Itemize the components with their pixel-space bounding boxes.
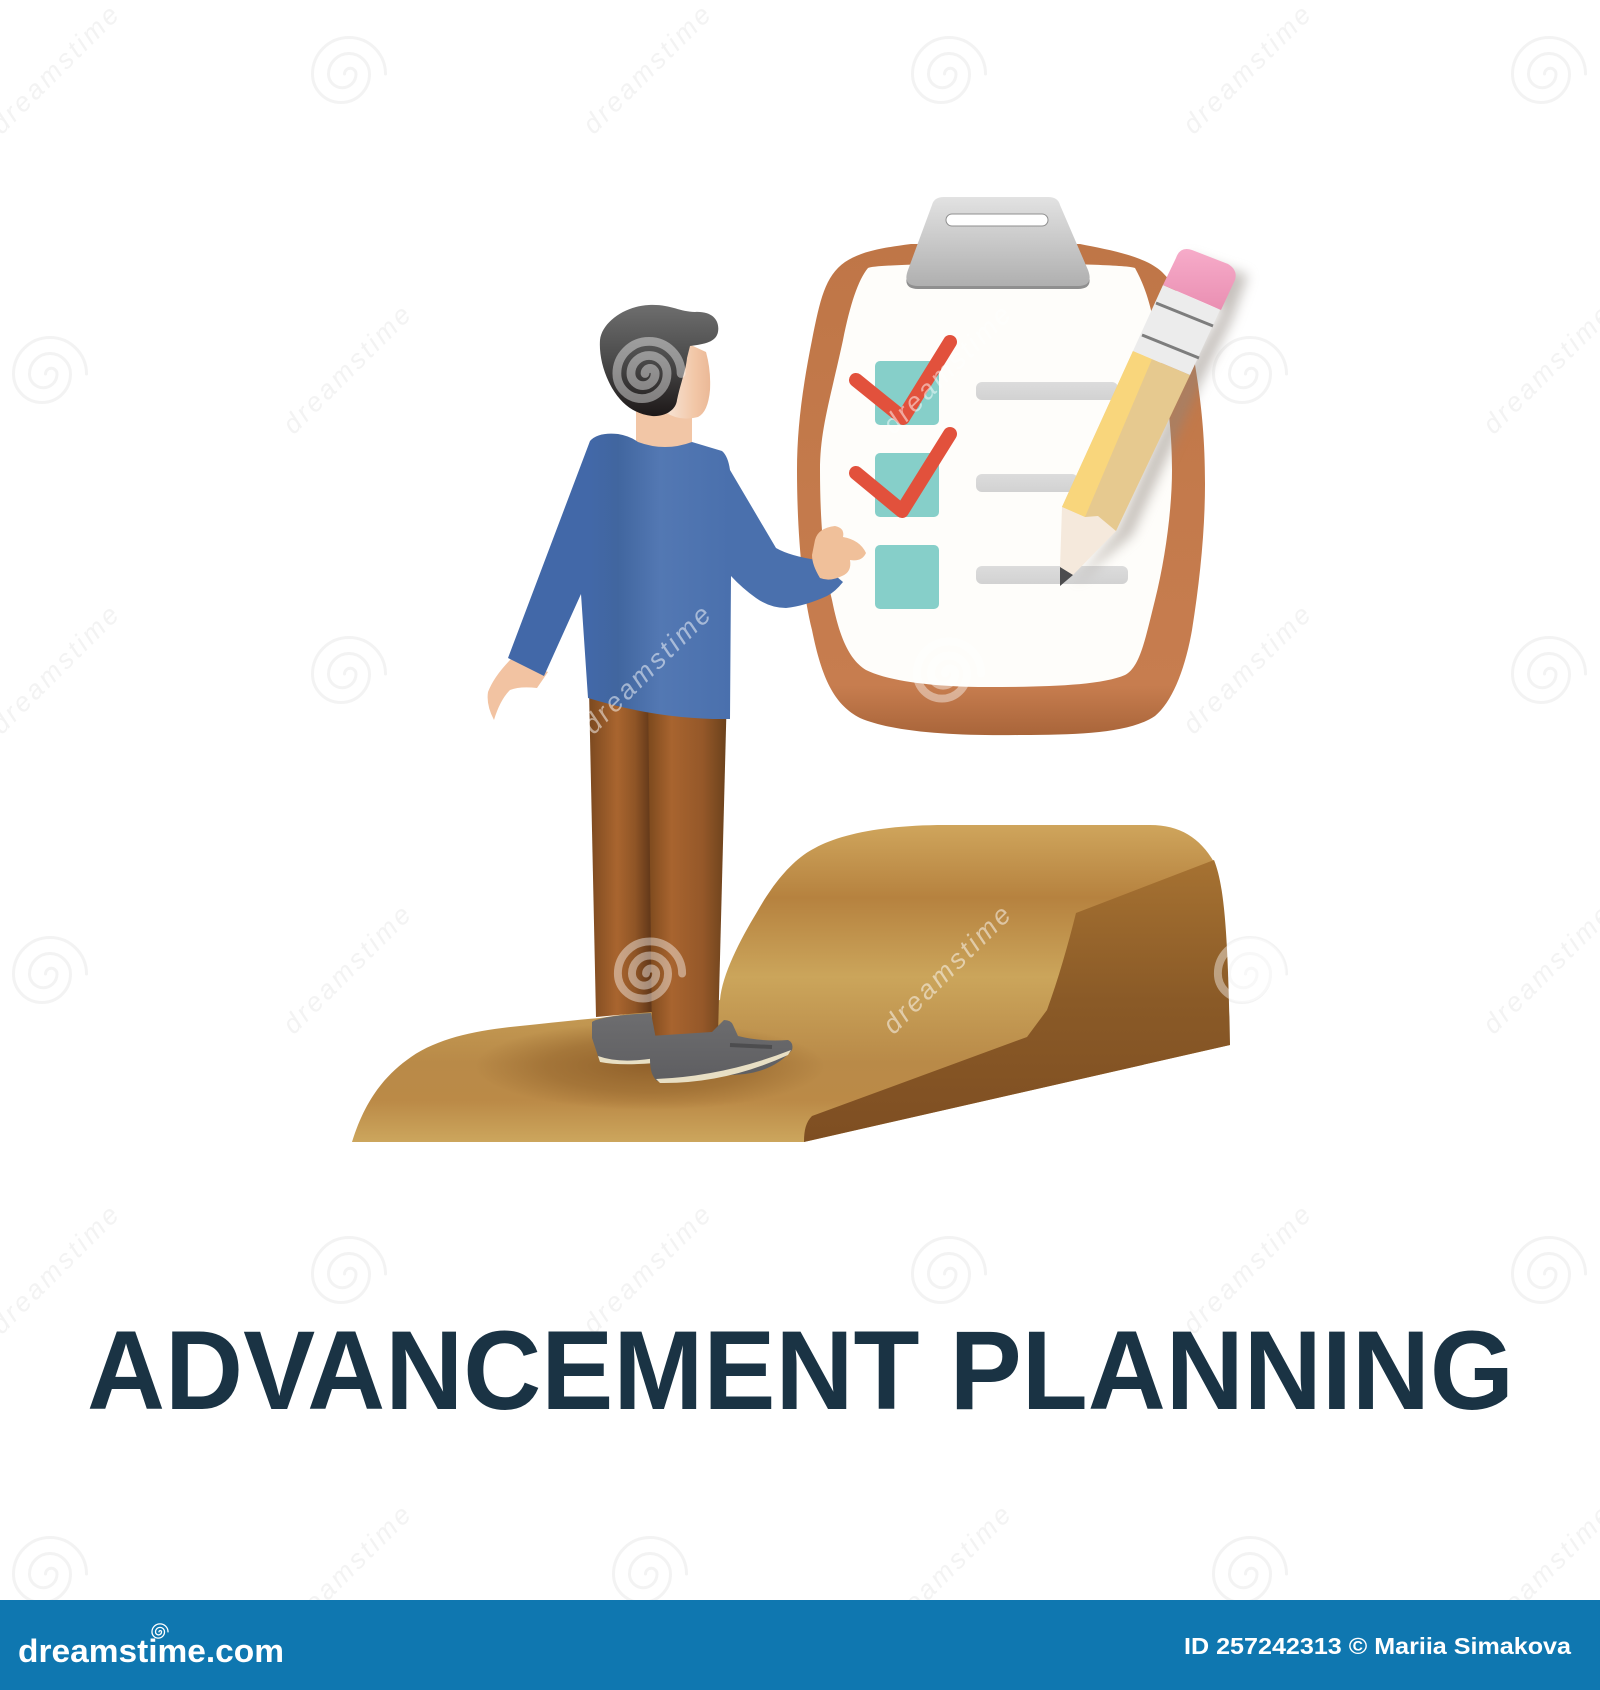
- pencil eraser: [1163, 249, 1236, 310]
- watermark text: dreamstime: [277, 900, 417, 1040]
- watermark text: dreamstime: [877, 1500, 1017, 1640]
- shoes: [592, 1013, 792, 1083]
- right hand: [812, 526, 866, 580]
- ground shadow under feet: [475, 1022, 825, 1110]
- clipboard: [797, 197, 1205, 735]
- watermark text: dreamstime: [577, 1200, 717, 1340]
- watermark text: dreamstime: [277, 300, 417, 440]
- watermark over illustration: dreamstime: [877, 300, 1017, 440]
- watermark text: dreamstime: [1177, 1200, 1317, 1340]
- ground: sloped hill: [352, 825, 1230, 1142]
- neck: [636, 410, 692, 449]
- person: [488, 305, 866, 1083]
- watermark text: dreamstime: [577, 0, 717, 140]
- clipboard board: [797, 244, 1205, 735]
- checkbox row 1: [856, 342, 1118, 425]
- cliff dark face: [804, 860, 1230, 1142]
- title: ADVANCEMENT PLANNING: [87, 1308, 1514, 1433]
- watermark over illustration: [577, 300, 1282, 1040]
- pencil: [1060, 249, 1248, 586]
- paper: [820, 264, 1172, 687]
- sweater: [508, 434, 843, 719]
- pencil shadow: [1074, 255, 1248, 584]
- watermark over illustration: dreamstime: [877, 900, 1017, 1040]
- face: [665, 340, 710, 419]
- pencil tip: [1060, 507, 1116, 575]
- watermark over illustration: dreamstime: [577, 600, 717, 740]
- watermark text: dreamstime: [1177, 0, 1317, 140]
- clip: [906, 197, 1090, 289]
- watermark text: dreamstime: [277, 1500, 417, 1640]
- footer bar: [0, 1600, 1600, 1690]
- trousers: [589, 690, 727, 1037]
- footer credit: ID 257242313 © Mariia Simakova: [1184, 1633, 1571, 1659]
- checkbox row 3: [875, 545, 1128, 609]
- pencil body: [1062, 351, 1190, 531]
- footer logo: dreamstime.com: [18, 1633, 284, 1669]
- watermark text: dreamstime: [1177, 600, 1317, 740]
- checkbox row 2: [856, 434, 1078, 517]
- left hand: [488, 658, 548, 720]
- hair: [600, 305, 718, 416]
- pencil ferrule: [1133, 285, 1220, 375]
